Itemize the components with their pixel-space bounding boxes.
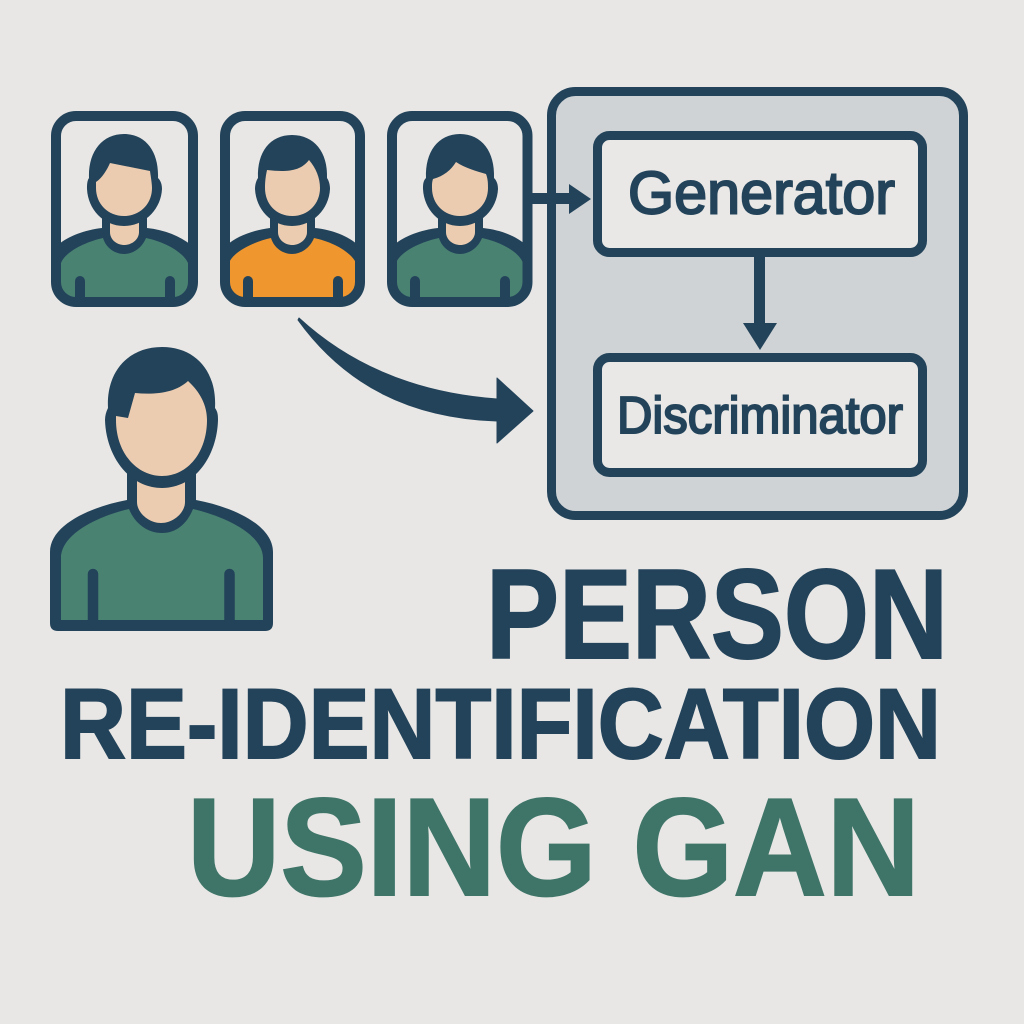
title line: person: PERSON [486, 543, 948, 685]
title line: re-identification: RE-IDENTIFICATION [60, 668, 941, 779]
card: person one, green shirt [56, 116, 193, 302]
card: person three, green shirt [392, 116, 528, 302]
panel: GAN block [552, 92, 964, 516]
title line: using gan: USING GAN [187, 770, 920, 925]
arrow: gallery to generator [531, 184, 591, 214]
card: person two, orange shirt [225, 116, 360, 302]
discriminator box [598, 358, 922, 472]
curved arrow: query to discriminator [298, 318, 533, 443]
large query person icon [50, 347, 273, 631]
generator box [598, 136, 922, 252]
generator box: Generator [628, 160, 895, 226]
arrow: generator to discriminator [743, 255, 777, 350]
title [60, 543, 948, 925]
discriminator box: Discriminator [617, 387, 903, 445]
